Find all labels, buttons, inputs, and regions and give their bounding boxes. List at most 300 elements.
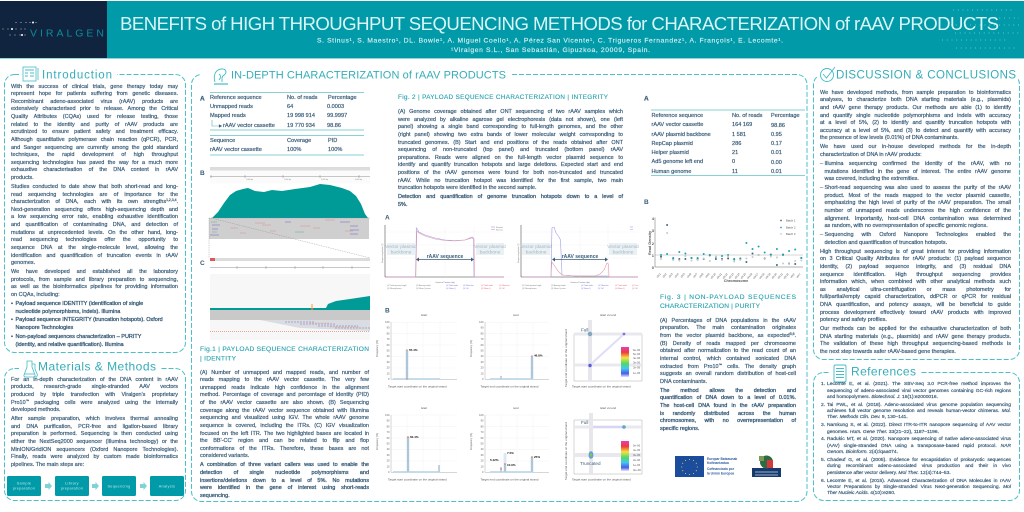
text block: introduction body: Non-payload sequences characterization – PURITY <box>16 334 141 340</box>
chart: tend, non-truncated: Target end coordinate on the original strand <box>480 384 539 388</box>
heatmap: tstart vs tend, non-truncated: 1e-06 <box>633 371 641 375</box>
text block: introduction body: characterization of DNA, each with its own strengths1,2,3,4. <box>11 198 178 205</box>
figure 3 panel B: read density chart: chr5 <box>679 272 686 279</box>
text block: introduction body: mutations at unprecedented levels. On the other hand, long- <box>11 230 178 236</box>
figure 1 table A: Sequence <box>210 138 235 144</box>
figure 3 caption: CHARACTERIZATION | PURITY <box>660 303 761 310</box>
arrow <box>140 482 147 490</box>
text block: figure 3 legend: The host-cell DNA found in the rAAV preparation <box>660 403 796 409</box>
text block: reference list: 1. <box>821 382 825 387</box>
heatmap: tstart vs tend, non-truncated: Target end coordinate on the original strand <box>564 329 568 387</box>
text block: introduction body: and Sanger sequencing are currently among the gold standard <box>11 144 178 150</box>
figure 2 panel A: right coverage chart: QC Total genome length <box>522 284 541 287</box>
figure 2 panel A: right coverage chart <box>517 225 639 290</box>
text block: figure 3 legend: internal control, which contained sonicated DNA <box>660 356 796 362</box>
text block: figure 3 legend: obtained after normalization to the read count of an <box>660 348 796 354</box>
chart: tstart, truncated: 100 <box>385 413 390 417</box>
figure 3 table A: 0 <box>732 159 735 165</box>
figure 1 table A: Reference sequence <box>210 95 262 101</box>
heatmap: tstart vs tend, truncated: Full <box>581 420 588 425</box>
heatmap: tstart vs tend, truncated: 4e-06 <box>633 448 641 452</box>
figure 3 panel B: read density chart: Chromosome <box>724 279 748 283</box>
figure 3 table A: rAAV vector cassette <box>652 122 703 128</box>
logo: European Union co-funding: Cofinanciado por <box>707 467 735 471</box>
chart: tend, non-truncated: 50 <box>481 348 484 352</box>
text block: figure 3 legend: suggests an overall random distribution of host-cell <box>660 371 796 377</box>
text block: figure 1 legend: coverage along the rAAV vector sequence obtained with Illumina <box>200 408 369 414</box>
figure 1 table A: Coverage <box>287 138 311 144</box>
text block: discussion body: as analytical ultra-centrifugation or mass photometry for <box>820 287 1011 293</box>
text block: introduction body: Payload sequence INTEGRITY (truncation hotspots). Oxford <box>16 317 163 323</box>
figure 3 panel B: read density chart: chrX <box>789 272 796 279</box>
affiliation: ¹Viralgen S.L., San Sebastián, Gipuzkoa, 20009, Spain. <box>451 47 650 54</box>
chart: tstart, truncated: 50 <box>387 442 390 446</box>
chart: tend, non-truncated: 90 <box>481 326 484 330</box>
chart: tstart, non-truncated: 100 <box>385 320 390 324</box>
text block: introduction body: scrutinized to ensure patient safety and treatment efficacy. <box>11 129 178 135</box>
figure 3 panel B: read density chart: chr22 <box>782 272 790 280</box>
figure 3 table A: 286 <box>732 141 741 147</box>
figure 3 panel B: read density chart: chr17 <box>752 272 760 280</box>
figure 3 caption: Fig. 3 | NON-PAYLOAD SEQUENCES <box>660 294 797 301</box>
chart: tstart, truncated: 80 <box>387 424 390 428</box>
text block: introduction body: represent hope for patients suffering from genetic diseases. <box>11 91 178 97</box>
text block: figure 1 legend: sequencing. <box>200 493 230 499</box>
chart: tend, truncated: 10.9% <box>507 463 516 467</box>
text block: introduction body: sequencing technologies has paved the way for a much more <box>11 160 178 166</box>
chart: tend, truncated: 90 <box>481 419 484 423</box>
figure 3 table A: RepCap plasmid <box>652 141 693 147</box>
figure 3 table A: 21 <box>732 150 738 156</box>
figure 2 panel A: right coverage chart: backbone <box>613 250 634 256</box>
text block: figure 1 legend: conformations of the ITRs. Therefore, these bases are not <box>200 446 369 452</box>
figure 2 panel A: right coverage chart: QC Mean Q <box>581 288 591 290</box>
text block: introduction body: Although quantitative polymerase chain reaction (qPCR), PCR, <box>11 137 178 143</box>
text block: figure 1 legend: of the rAAV vector cassette are also shown. (B) Sequencing <box>200 400 369 406</box>
text block: introduction body: a low sequencing error rate, enabling exhaustive identification <box>11 214 178 220</box>
text block: reference list: (AAV) single-stranded DNA using a transposase-based rapid protocol. NAR <box>827 444 1011 449</box>
text block: discussion body: analyses, to characterize both DNA starting materials (e.g., plasmids) <box>820 97 1011 103</box>
figure 2 panel A: left coverage chart: Vector plasmid <box>474 244 506 250</box>
text block: figure 1 legend: were identified in the gene of interest using short-reads <box>200 485 369 491</box>
figure 3 panel B: read density chart: chr21 <box>776 272 784 280</box>
text block: introduction body: read sequencing technologies offer the opportunity to <box>11 237 178 243</box>
text block: introduction body: Nanopore Technologies <box>16 325 73 331</box>
text block: discussion body: – <box>820 185 823 191</box>
text block: reference list: 4. <box>821 437 825 442</box>
figure 2 panel A: right coverage chart: QC Mean Q-score <box>551 288 566 290</box>
figure 1 table A: 99.9997 <box>327 113 347 119</box>
panel: materials and methods <box>4 360 186 501</box>
text block: reference list: 6. <box>821 478 825 484</box>
figure 2 panel A: left coverage chart: QC Mean Q <box>481 288 491 290</box>
panel: introduction <box>4 66 186 353</box>
figure 2 panel A: right coverage chart: Genome Position (bp) <box>570 281 590 284</box>
arrow <box>92 482 99 490</box>
text block: reference list: 5. <box>821 458 825 463</box>
text block: figure 3 legend: preparation. The main contamination originates <box>660 325 796 331</box>
text block: reference list: Lecomte E, et al. (2015). Advanced Characterization of DNA Molecules in rAAV <box>827 478 1011 484</box>
text block: discussion body <box>820 90 1012 355</box>
text block: reference list: Chadeuf G, et al. (2005). Evidence for encapsidation of prokaryotic sequences <box>827 458 1011 463</box>
figure 3 caption <box>660 294 797 310</box>
chart: tend, truncated: 5.42% <box>490 458 499 462</box>
chart: tend, truncated: Target end coordinate on the original strand <box>480 478 539 482</box>
text block: discussion body: – <box>820 161 823 167</box>
text block: introduction body: extensively characterised prior to release. Among the Critical <box>11 106 178 112</box>
figure 3 table A: 0.00 <box>771 160 782 166</box>
text block: introduction body: protocols, from sample and library preparation to sequencing, <box>11 277 178 283</box>
figure 3 table A: 11 <box>732 169 738 175</box>
text block: discussion body: on 3 Critical Quality Attributes for rAAV products: (1) payload sequence <box>820 256 1011 262</box>
figure 3 panel B: read density chart: chr6 <box>686 272 693 279</box>
figure 2 panel A: left coverage chart: backbone <box>391 250 412 256</box>
chart: tend, non-truncated: 70 <box>481 337 484 341</box>
text block: introduction body: sequence DNA at the single-molecule level, allowing the <box>11 245 178 251</box>
authors: S. Stinus¹, S. Maestro¹, DL. Bowie¹, A. Miguel Coello¹, A. Pérez San Vicente¹, C. Trigueros Fernandez¹, A. François¹, E. Lecomte¹. <box>317 37 783 44</box>
text block: reference list: 2. <box>821 403 825 408</box>
heatmap: tstart vs tend, non-truncated: Full <box>581 328 588 332</box>
label A: A <box>644 96 649 102</box>
chart: tend, non-truncated <box>469 313 549 388</box>
text block: figure 1 legend: detection of single nucleotide polymorphisms and <box>200 470 369 476</box>
logo: Viralgen <box>0 1 107 58</box>
chart: tend, non-truncated: 0 <box>482 377 484 381</box>
figure 3 table A: 0.17 <box>771 141 782 147</box>
figure 3 panel B: read density chart: 3 <box>652 228 655 233</box>
chart: tend, truncated: 50 <box>481 442 484 446</box>
text block: materials and methods body: produced by triple transfection with Viralgen's proprietary <box>11 392 178 398</box>
text block: figure 3 legend: from the vector plasmid backbone, as expected5,6. <box>660 332 796 339</box>
figure 3 panel B: read density chart: chr9 <box>704 272 711 279</box>
chart: tend, truncated: 70 <box>481 430 484 434</box>
heatmap: tstart vs tend, truncated: 1e-06 <box>633 463 641 467</box>
text block: materials and methods body: developed methods. <box>11 407 61 413</box>
chart: tend, non-truncated: 40 <box>481 354 484 358</box>
figure 1 table A: 0.0003 <box>327 104 344 110</box>
figure 1 table A: Mapped reads <box>210 113 246 119</box>
text block: discussion body: characterization of DNA in rAAV products: <box>820 152 922 158</box>
heatmap: tstart vs tend, non-truncated: 2e-06 <box>633 366 641 370</box>
figure 1 table A: 98.86 <box>327 123 341 129</box>
text block: introduction body: Recombinant adeno-associated virus (rAAV) products are <box>11 99 178 105</box>
text block: figure 3 legend: The method allows the detection and <box>660 388 796 394</box>
chart: tend, non-truncated: Frequency (%) <box>469 340 473 357</box>
label B: B <box>200 170 205 177</box>
heatmap: tstart vs tend, truncated: 5e-06 <box>633 444 641 448</box>
chart: tend, truncated: 80 <box>481 424 484 428</box>
chart: tstart, non-truncated: Frequency (%) <box>375 340 379 357</box>
step: sample preparation <box>7 476 41 496</box>
text block: figure 2 legend: panel) showing a single band corresponding to full-length genomes, and the other <box>398 124 623 130</box>
text block: figure 2 legend: preparations. Reads were aligned on the full-length vector plasmid sequence to <box>398 155 623 161</box>
text block: discussion body: the next step towards safer rAAV-based gene therapies. <box>820 349 956 355</box>
text block: materials and methods body: Pro10™ packaging cells were analyzed using the internally <box>11 399 178 406</box>
chart: tstart, non-truncated: 60 <box>387 343 390 347</box>
figure 1 panel B: genome coverage <box>200 167 370 258</box>
step: analysis: Analysis <box>159 484 175 488</box>
heatmap: tstart vs tend, non-truncated: 3e-06 <box>633 360 641 364</box>
figure 3 panel B: read density chart: chr7 <box>692 272 699 279</box>
figure 3 table A: Reference sequence <box>652 113 703 119</box>
heatmap: tstart vs tend, truncated: Target start coordinate on the original strand <box>572 478 631 482</box>
text block: discussion body: and quantify single nucleotide polymorphisms and indels with accuracy <box>820 113 1011 119</box>
text block: figure 1 legend: sequencing and visualized using IGV. The whole rAAV genome <box>200 415 369 421</box>
step: library preparation: preparation <box>61 486 83 490</box>
text block: reference list: Ther Nucleic Acids. 4(10):e260. <box>827 491 895 496</box>
figure 1 table A: 100% <box>328 147 342 153</box>
figure 3 panel B: read density chart: chr20 <box>770 272 778 280</box>
text block: figure 2 legend <box>398 108 624 208</box>
text block: introduction body: as well as the bioinformatics pipelines for providing information <box>11 284 178 290</box>
heading: Materials & Methods: Materials & Methods <box>38 360 156 374</box>
text block: reference list: during recombinant adeno-associated virus production and their in vivo <box>827 464 1011 469</box>
text block: figure 2 legend: rAAV. While no truncation hotspot was identified for the first sample, two main <box>398 178 623 184</box>
step: sequencing: Sequencing <box>107 484 131 488</box>
heading: Introduction: Introduction <box>42 70 112 82</box>
icon: document <box>834 365 846 382</box>
logo: Viralgen: VIRALGEN <box>30 28 104 40</box>
chart: tend, truncated: 7.5% <box>507 451 514 455</box>
figure 1 table A: Unmapped reads <box>210 104 253 110</box>
legend: Batch 1 <box>786 218 796 222</box>
logo: European Union co-funding: la Unión Europea <box>707 472 734 476</box>
text block: figure 2 legend: (right panel) showing two extra bands of lower molecular weight corresponding to <box>398 132 623 138</box>
text block: discussion body: detection and quantification of truncation hotspots. <box>824 240 947 246</box>
text block: reference list: Ther. Methods Clin. Dev. 9, 130–141. <box>827 415 908 420</box>
legend: Batch 2 <box>786 226 796 230</box>
figure 2 panel A: right coverage chart: QC Total reads <box>615 284 627 287</box>
text block: discussion body: DNA starting materials (e.g., plasmids) and rAAV gene therapy products. <box>820 334 1011 340</box>
text block: figure 3 legend: (B) Density of reads mapped per chromosome <box>660 341 796 347</box>
text block: discussion body: accuracy at a level of 5%, and (3) to detect and quantify with accuracy <box>820 128 1011 134</box>
panel: in-depth characterization of rAAV products <box>191 68 808 502</box>
chart: tend, non-truncated: 100 <box>479 320 484 324</box>
chart: tstart, non-truncated: 20 <box>387 366 390 370</box>
text block: figure 2 legend: 5%. <box>398 202 407 208</box>
text block: figure 2 legend: identify and quantify truncation hotspots and large deletions. Expected start and end <box>398 162 623 168</box>
chart: tstart, non-truncated: 0 <box>388 377 390 381</box>
text block: discussion body: alignment. Importantly, host-cell DNA contamination was determined <box>824 216 1011 222</box>
text block: figure 3 legend: quantification of DNA down to a level of 0.01%. <box>660 395 796 401</box>
figure 2 panel A: left coverage chart: backbone <box>480 250 501 256</box>
text block: discussion body: mutations identified in the gene of interest. The entire rAAV genome <box>824 169 1011 175</box>
text block: introduction body: • <box>11 317 13 323</box>
figure 3 panel B: read density chart: chr18 <box>758 272 766 280</box>
figure 3 panel B: read density chart: chr11 <box>716 272 723 280</box>
text block: figure 2 legend: truncated genomes. (B) Start and end positions of the reads obtained after ONT <box>398 140 623 146</box>
text block: discussion body: information which, when combined with other analytical methods such <box>820 279 1011 285</box>
label C: C <box>200 260 205 267</box>
text block: materials and methods body: and DNA purification, PCR-free and ligation-based library <box>11 424 178 430</box>
text block: figure 3 legend: (A) Percentages of DNA populations in the rAAV <box>660 318 796 324</box>
panel: discussion and conclusions <box>813 66 1020 360</box>
figure 1 table A: PID <box>328 138 337 144</box>
label B: B <box>644 199 649 206</box>
chart: tend, truncated: 100 <box>479 413 484 417</box>
figure 2 panel A: left coverage chart: Sequencing depth (X) <box>381 243 384 263</box>
text block: reference list: Lecomte E, et al. (2021). The SBV-Seq 3.0 PCR-free method improves the <box>827 382 1011 387</box>
text block: figure 2 legend: truncation hotspots were identified in the second sample. <box>398 185 536 191</box>
figure 2 caption: Fig. 2 | PAYLOAD SEQUENCE CHARACTERIZATION | INTEGRITY <box>398 94 609 101</box>
text block: materials and methods body: Finally, reads were analyzed by custom made bioinformatics <box>11 454 178 460</box>
chart: tstart, non-truncated: 40 <box>387 354 390 358</box>
chart: tend, truncated: 0 <box>482 470 484 474</box>
chart: tstart, truncated: 70 <box>387 430 390 434</box>
figure 1 table A: rAAV vector cassette <box>210 147 262 153</box>
chart: tend, truncated: 30 <box>481 453 484 457</box>
text block: figure 1 legend: reads mapping to the rAAV vector cassette. The very few <box>200 377 369 383</box>
figure 3 table A: Percentage <box>771 113 800 119</box>
text block: introduction body: With the success of clinical trials, gene therapy today may <box>11 84 178 90</box>
decorative dot pattern <box>942 10 1019 48</box>
text block: figure 1 legend: A combination of three variant callers was used to enable the <box>200 462 369 468</box>
figure 1 table A: 64 <box>287 104 293 110</box>
heatmap: tstart vs tend, truncated: tstart vs tend <box>600 406 616 410</box>
figure 3 table A: Ad5 genome left end <box>652 159 703 165</box>
text block: materials and methods body: After sample preparation, which involves thermal annealing <box>11 416 178 422</box>
figure 1 panel C: left ITR view <box>200 258 370 340</box>
chart: tend, truncated: 60 <box>481 436 484 440</box>
chart: tend, non-truncated: 46.8% <box>534 354 543 358</box>
chart: tend, truncated: 10 <box>481 464 484 468</box>
step: sample preparation: Sample <box>17 482 31 486</box>
text block: materials and methods body: either the NextSeq2000 sequencer (Illumina technology) or the <box>11 439 178 445</box>
legend <box>781 218 796 236</box>
text block: discussion body: at a level of 5%, (2) to identify and quantify truncation hotspots with <box>820 120 1011 126</box>
figure 2 panel A: right coverage chart: Vector plasmid <box>520 244 552 250</box>
figure 1 table A: 19 998 914 <box>287 113 315 119</box>
figure 3 table A: 0.01 <box>771 150 782 156</box>
figure 2 panel A: left coverage chart: Forward <box>496 227 503 229</box>
text block: figure 1 legend: focused on the left ITR. The two highlighted bases are located in <box>200 430 369 436</box>
text block: introduction body: on CQAs, including: <box>11 292 60 298</box>
logo: European Union co-funding: Kofinantzatua <box>707 461 729 465</box>
figure 3 panel B: read density chart: Read Density <box>648 230 652 255</box>
text block: reference list: and homopolymers. Biotechnol. J. 16(1):e2000016. <box>827 395 938 400</box>
text block: figure 3 legend <box>660 318 796 432</box>
figure 3 panel B: read density chart: chr4 <box>673 272 680 279</box>
chart: tstart, truncated: 0 <box>388 470 390 474</box>
figure 3 table A: 98.86 <box>771 123 785 129</box>
figure 3 table A: 0.95 <box>771 132 782 138</box>
text block: discussion body: We have used our in-house developed methods for the in-depth <box>820 144 1011 150</box>
chart: tstart, non-truncated: Target start coordinate on the original strand <box>388 384 447 388</box>
chart: tstart, truncated: 40 <box>387 447 390 451</box>
text block: figure 1 legend: method. Percentage of coverage and percentage of identity (PID) <box>200 392 369 398</box>
text block: discussion body: product. Most of the reads mapped to the vector plasmid cassette, <box>824 193 1011 199</box>
text block: introduction body: Studies conducted to date show that both short-read and long- <box>11 184 178 190</box>
icon: flasks <box>24 361 38 377</box>
figure 2 panel B label: B <box>385 308 390 314</box>
text block: discussion body: sequence identification. High throughput sequencing provides <box>820 272 1011 278</box>
text block: figure 1 legend: the BB'-CC' region and can be related to flip and flop <box>200 438 369 444</box>
figure 1 caption <box>200 346 369 362</box>
figure 2 panel A: right coverage chart: rAAV sequence <box>562 254 599 260</box>
process flow: main steps <box>7 476 184 496</box>
figure 2 panel A: right coverage chart: QC Mean Q <box>615 288 625 290</box>
text block: introduction body: and quantification of contaminating DNA, and detection of <box>11 222 178 228</box>
text block: introduction body: products. <box>11 175 34 181</box>
text block: introduction body: techniques, the rapid development of high throughput <box>11 152 178 158</box>
text block: figure 1 legend <box>200 370 370 499</box>
chart: tstart, truncated <box>375 406 457 482</box>
figure 3 table A: 1 581 <box>732 132 746 138</box>
header banner <box>0 1 1024 59</box>
figure 3 panel B: read density chart: chr16 <box>746 272 754 280</box>
text block: discussion body: emphasizing the high level of purity of the rAAV preparation. The small <box>824 200 1011 206</box>
text block: discussion body: High throughput sequencing is of great interest for providing information <box>820 249 1011 255</box>
text block: figure 1 legend: considered variants. <box>200 453 249 459</box>
chart: tstart, truncated: Target start coordinate on the original strand <box>388 478 447 482</box>
text block: introduction body: • <box>11 334 13 340</box>
text block: introduction body: exhaustive characterisation of the DNA content in rAAV <box>11 167 178 173</box>
heatmap: tstart vs tend, non-truncated: 6e-06 <box>633 348 641 352</box>
arrow <box>45 482 52 490</box>
chart: tstart, non-truncated: 80 <box>387 331 390 335</box>
figure 2 panel A: left coverage chart: QC Total reads <box>481 284 493 287</box>
text block: materials and methods body: For an in-depth characterization of the DNA content in rAAV <box>11 377 178 383</box>
heatmap: tstart vs tend, truncated: 2e-06 <box>633 458 641 462</box>
chart: tstart, truncated: tstart <box>421 406 427 410</box>
chart: tstart, non-truncated <box>375 313 457 388</box>
heatmap: tstart vs tend, truncated: Truncated <box>580 461 601 466</box>
figure 3 table A: rAAV plasmid backbone <box>652 132 711 138</box>
text block: reference list: achieves full vector genome resolution and reveals human-vector chimeras. Mol. <box>827 409 1011 414</box>
chart: tstart, truncated: 90 <box>387 419 390 423</box>
text block: reference list: Genom. Bioinform. 2(4):lqaa074. <box>827 450 898 455</box>
figure 1 panel B: genome coverage: 2,000 bp <box>284 179 291 181</box>
figure 3 panel B: read density chart: chr1 <box>655 272 662 279</box>
figure 1 table A: No. of reads <box>287 95 318 101</box>
text block: reference list: Namkung S, et al. (2022). Direct ITR-to-ITR nanopore sequencing of AAV vector <box>827 423 1011 428</box>
figure 2 panel A: right coverage chart: QC Mean len <box>598 285 609 287</box>
text block: figure 2 legend: Detection and quantification of genome truncation hotspots down to a level of <box>398 194 623 200</box>
chart: tend, non-truncated: tend <box>513 313 519 317</box>
text block: reference list: sequencing of adeno-associated viral vector genomes containing GC-rich regions <box>827 389 1011 394</box>
title: BENEFITS of HIGH THROUGHPUT SEQUENCING METHODS for CHARACTERIZATION of rAAV PRODUCTS <box>120 13 999 34</box>
chart: tstart, truncated: Frequency (%) <box>375 433 379 450</box>
figure 2 panel A: left coverage chart: Vector plasmid <box>385 244 417 250</box>
figure 3 panel B: read density chart <box>644 199 803 283</box>
text block: materials and methods body <box>10 376 178 468</box>
figure 3 table A: Helper plasmid <box>652 150 689 156</box>
figure 1 panel B: genome coverage: 4,000 bp <box>355 179 362 181</box>
text block: discussion body: was covered, including the extremities. <box>824 176 919 182</box>
text block: reference list: Vector Preparations by Single-stranded Virus Next-generation Sequencing. Mol <box>827 485 1011 490</box>
figure 3 panel B: read density chart: chr12 <box>721 272 729 280</box>
figure 3 table A: 0.01 <box>771 169 782 175</box>
panel: references <box>813 364 1020 501</box>
figure 2 panel A: left coverage chart: QC GC <box>463 288 470 290</box>
figure 2 panel A: left coverage chart: Genome Position (bp) <box>435 281 455 284</box>
text block: discussion body: as random, with no overrepresentation of specific genomic regions. <box>824 223 988 229</box>
figure 3 table A: Human genome <box>652 169 691 175</box>
text block: discussion body: Our methods can be applied for the exhaustive characterization of both <box>820 326 1011 332</box>
text block: reference list: 3. <box>821 423 825 428</box>
text block: figure 2 legend: were analyzed by alkaline agarose gel electrophoresis (data not shown), one (left <box>398 117 623 123</box>
chart: tend, truncated: 20 <box>481 459 484 463</box>
text block: figure 3 legend: DNA contaminants. <box>660 379 707 385</box>
figure 2 panel A: right coverage chart: Sequencing depth (X) <box>517 243 520 263</box>
figure 3 panel B: read density chart: chr3 <box>667 272 674 279</box>
text block: figure 1 legend: unmapped reads indicate high confidence in the alignment <box>200 385 369 391</box>
text block: figure 3 legend: is randomly distributed across the human <box>660 411 796 417</box>
chart: tend, non-truncated: 10 <box>481 371 484 375</box>
chart: tstart, truncated: 30 <box>387 453 390 457</box>
heatmap: tstart vs tend, truncated <box>564 406 642 482</box>
text block: reference list: persistence after vector delivery. Mol Ther. 12(4):744–53. <box>827 471 951 476</box>
